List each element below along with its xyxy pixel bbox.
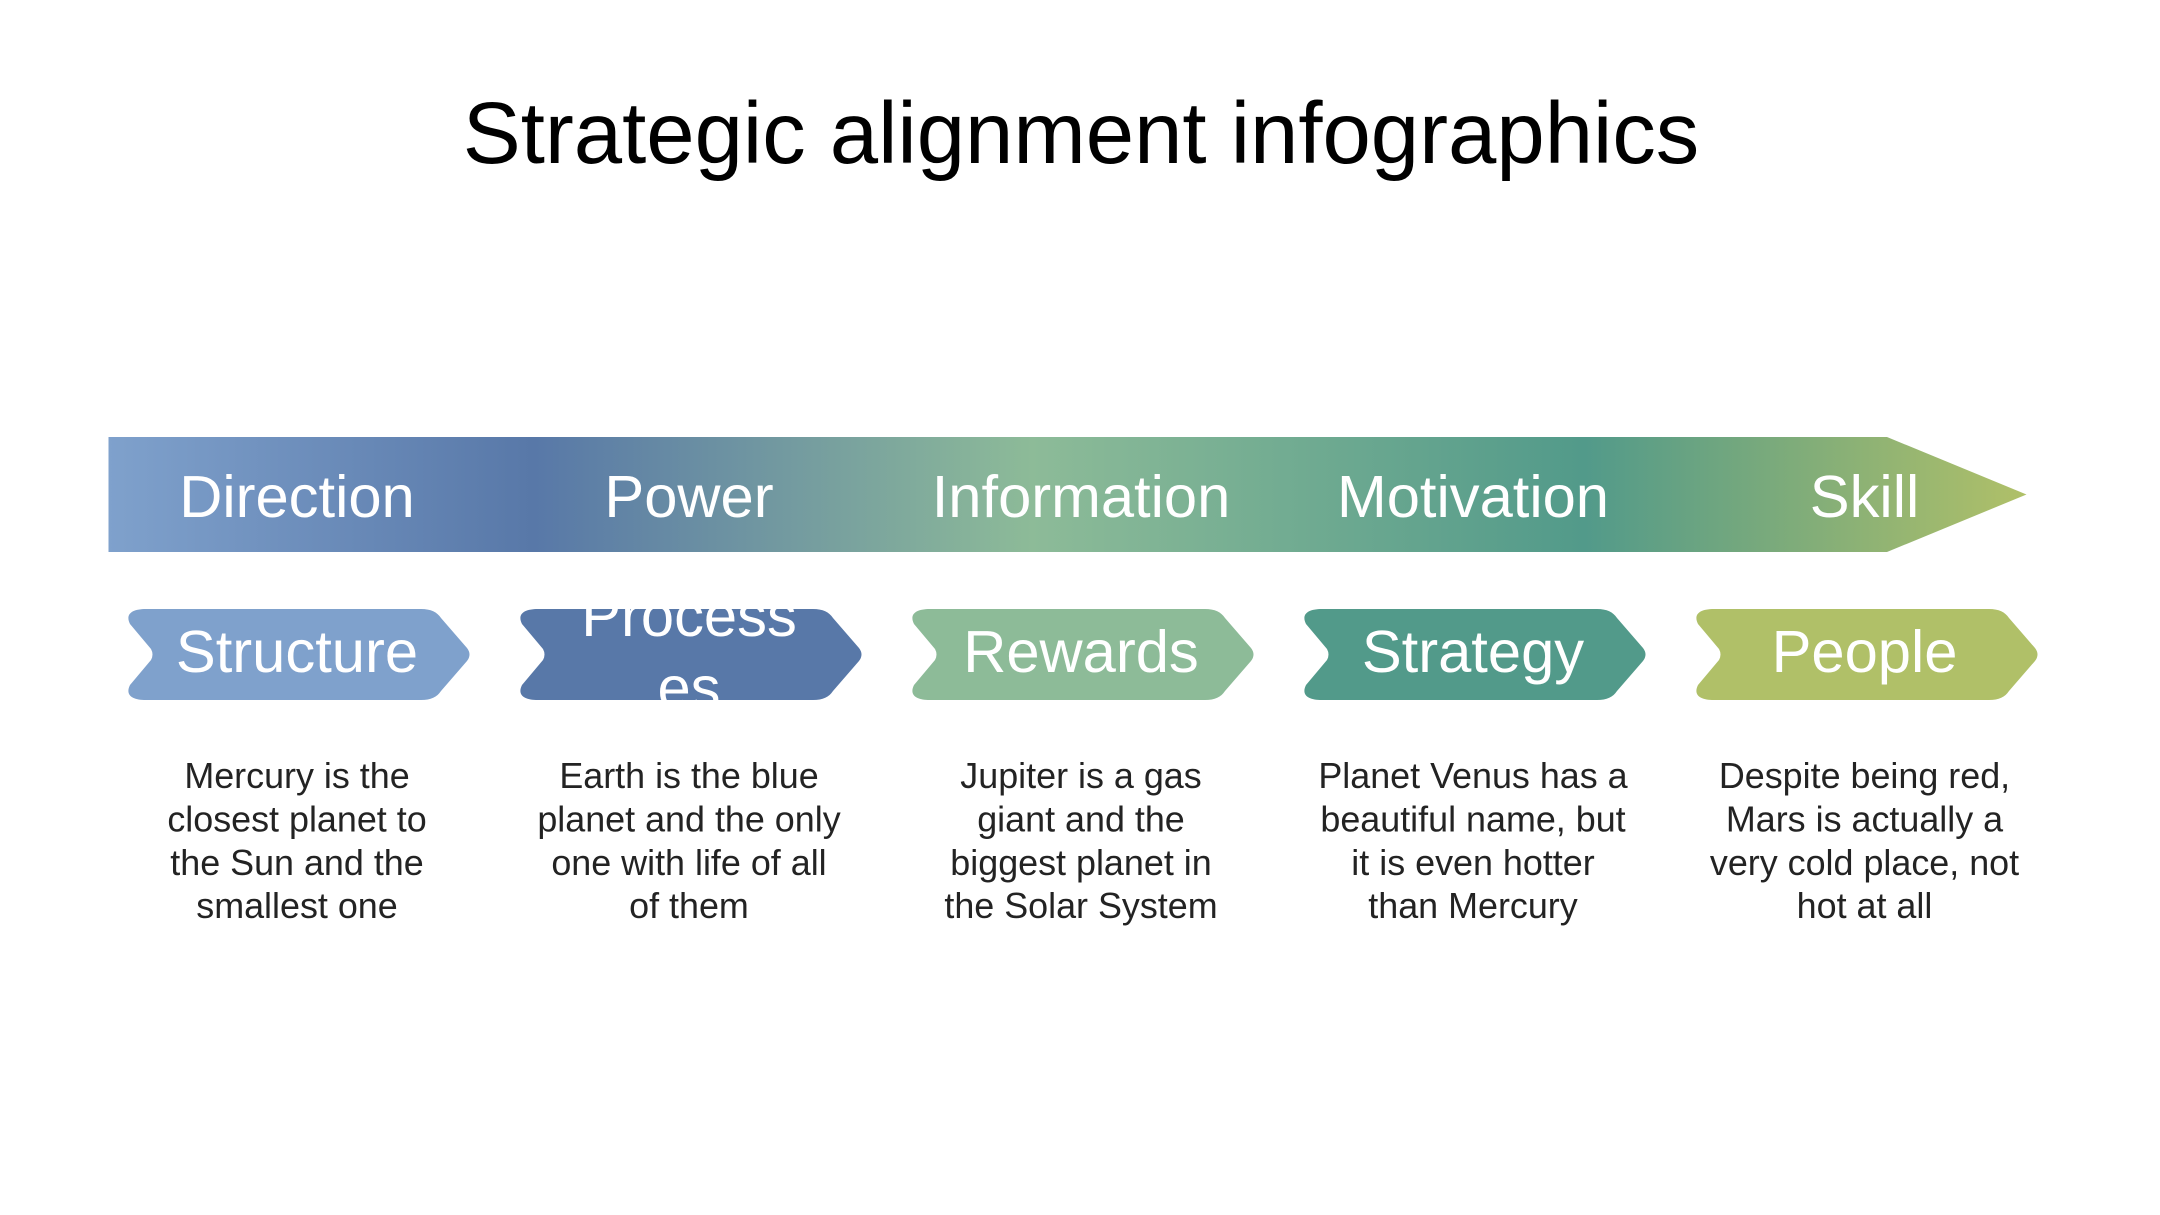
chevron: People	[1696, 609, 2038, 700]
text block: Jupiter: biggest planet in	[950, 843, 1212, 883]
chevron: Processes: Process	[581, 582, 797, 649]
text block: Venus: it is even hotter	[1351, 843, 1595, 883]
text block: Mercury: the Sun and the	[170, 843, 424, 883]
chevron: Rewards	[912, 609, 1254, 700]
chevron: People: People	[1772, 618, 1957, 685]
text block: Jupiter	[944, 756, 1218, 926]
text block: Mars: Mars is actually a	[1726, 799, 2003, 839]
text block: Earth: planet and the only	[537, 799, 841, 839]
text block: Venus	[1318, 756, 1628, 926]
text block: Venus: Planet Venus has a	[1318, 756, 1628, 796]
text block: Jupiter: Jupiter is a gas	[960, 756, 1202, 796]
text block: Mars: hot at all	[1797, 886, 1932, 926]
chevron: Strategy	[1304, 609, 1646, 700]
text block: Mars: Despite being red,	[1719, 756, 2010, 796]
chevron: Structure	[128, 609, 470, 700]
text block: Earth: of them	[629, 886, 749, 926]
chevron: Processes	[520, 582, 862, 721]
text block: Mercury: closest planet to	[167, 799, 427, 839]
text block: Mercury	[167, 756, 427, 926]
text block: Mars	[1710, 756, 2019, 926]
banner label: Direction: Direction	[179, 463, 415, 530]
text block: Mercury: Mercury is the	[184, 756, 410, 796]
chevron: Strategy: Strategy	[1362, 618, 1584, 685]
chevron: Structure: Structure	[176, 618, 418, 685]
banner label: Skill: Skill	[1810, 463, 1919, 530]
text block: Earth: Earth is the blue	[559, 756, 819, 796]
text block: Jupiter: giant and the	[977, 799, 1185, 839]
banner label: Power: Power	[604, 463, 774, 530]
text block: Earth: one with life of all	[551, 843, 827, 883]
text block: Mars: very cold place, not	[1710, 843, 2019, 883]
title: Strategic alignment infographics	[463, 85, 1699, 182]
chevron: Rewards: Rewards	[963, 618, 1199, 685]
banner label: Motivation: Motivation	[1337, 463, 1609, 530]
gradient arrow banner	[108, 437, 2026, 552]
text block: Jupiter: the Solar System	[944, 886, 1218, 926]
banner label: Information: Information	[932, 463, 1230, 530]
text block: Venus: beautiful name, but	[1320, 799, 1626, 839]
text block: Mercury: smallest one	[196, 886, 398, 926]
text block: Earth	[537, 756, 841, 926]
text block: Venus: than Mercury	[1368, 886, 1578, 926]
chevron: Processes: es	[657, 654, 721, 721]
